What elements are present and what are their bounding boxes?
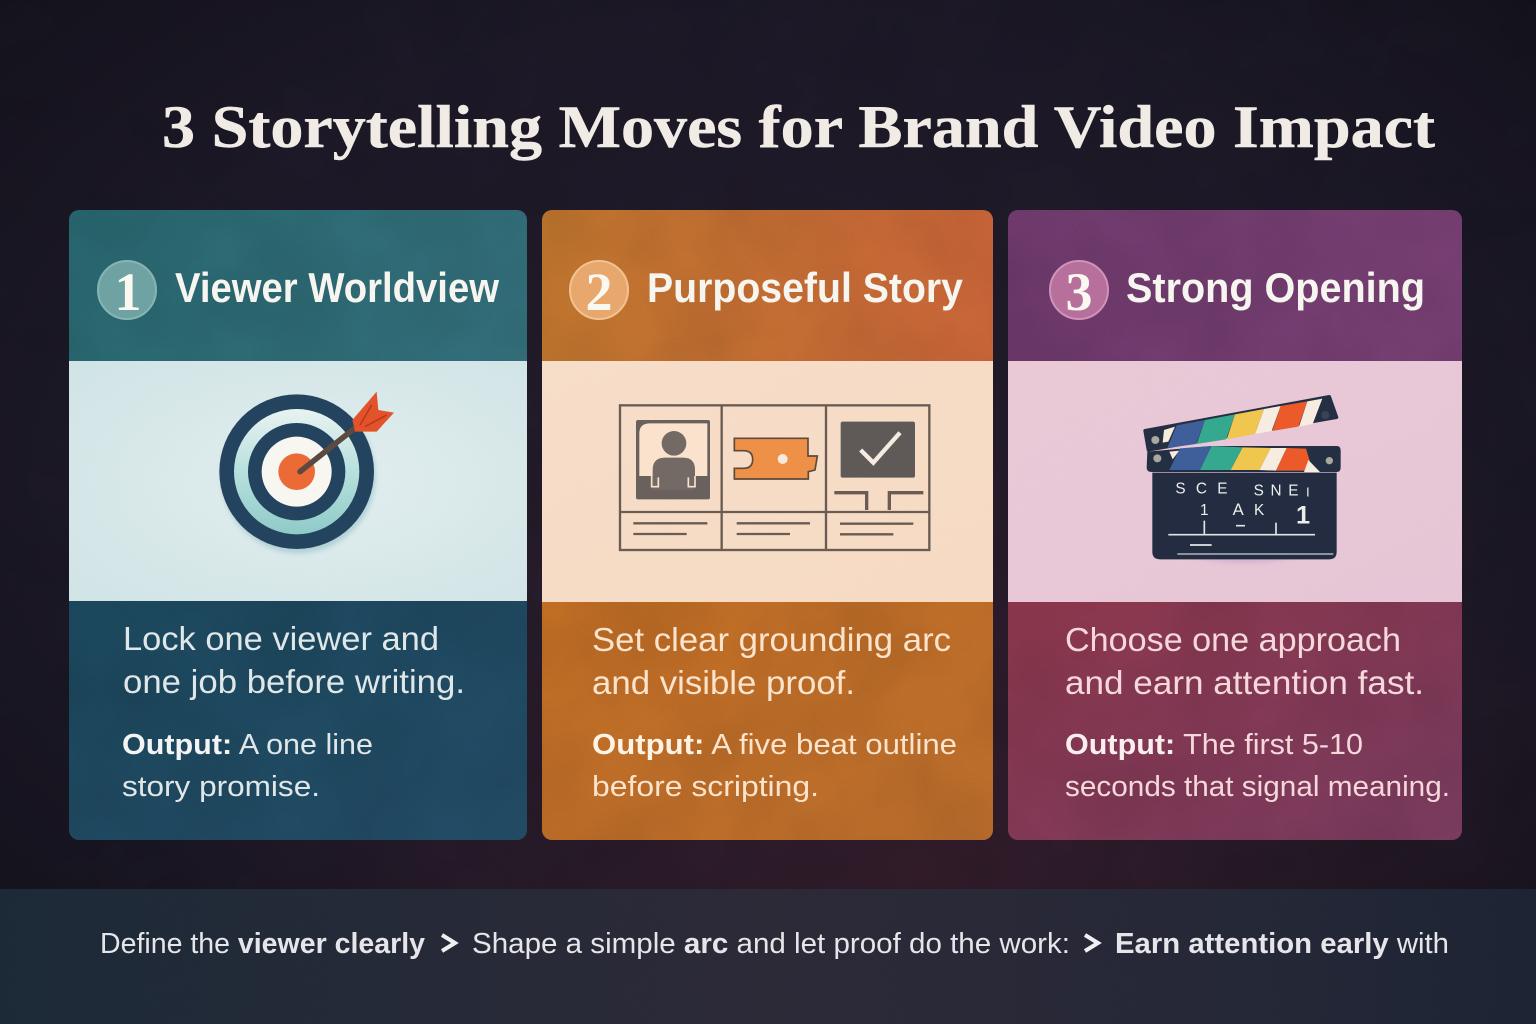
clapper lower stick [1147,446,1341,472]
output text: card 2: Output: A five beat outline [592,729,957,761]
arrow separator 2 [1085,935,1098,951]
storyboard frame: ticket [734,438,817,479]
clapper board: K [1254,502,1265,519]
clapper board [1152,473,1337,559]
panel: purposeful story [542,210,993,840]
body text: card 2: Set clear grounding arc [592,621,951,658]
icon: storyboard [620,405,929,550]
clapper board: A [1233,500,1245,519]
panel: strong opening: seconds that signal meaning. [1065,771,1450,803]
panel: strong opening: and earn attention fast. [1065,664,1424,701]
clapper board: SNE [1254,483,1305,500]
body text: card 1: Lock one viewer and [123,620,439,657]
footer step: arc: Shape a simple arc and let proof do the work: [472,928,1070,960]
number badge 1 [98,261,156,322]
number badge 1: 1 [114,262,142,322]
panel: viewer worldview: one job before writing. [123,663,465,700]
heading: purposeful story: Purposeful Story [647,264,964,311]
footer step: attention: Earn attention early with [1115,928,1449,960]
heading: viewer worldview: Viewer Worldview [175,264,499,311]
body text: card 3: Choose one approach [1065,621,1401,658]
panel: viewer worldview [69,210,527,840]
panel: viewer worldview: story promise. [122,771,320,803]
output text: card 3: Output: The first 5-10 [1065,729,1363,761]
footer band [0,889,1536,1024]
title: 3 Storytelling Moves for Brand Video Impact [162,94,1435,160]
number badge 3: 3 [1066,262,1092,322]
number badge 3 [1050,261,1108,322]
clapper board: I [1306,485,1310,500]
clapper top stick [1145,397,1337,450]
icon: clapperboard [1145,397,1341,563]
panel: strong opening [1008,210,1462,840]
icon: target with arrow [219,392,394,553]
clapper board: 1 [1200,502,1209,519]
clapper board: SCE [1175,480,1238,497]
panel: purposeful story: and visible proof. [592,664,855,701]
arrow separator 1 [442,935,455,951]
clapper board: 1 [1296,501,1310,529]
panel: purposeful story: before scripting. [592,771,819,803]
storyboard frame: check screen [834,422,923,510]
number badge 2: 2 [586,262,612,322]
heading: strong opening: Strong Opening [1126,264,1425,311]
storyboard frame: person [636,420,710,499]
output text: card 1: Output: A one line [122,729,373,761]
footer step: viewer: Define the viewer clearly [100,928,425,960]
number badge 2 [570,261,628,322]
